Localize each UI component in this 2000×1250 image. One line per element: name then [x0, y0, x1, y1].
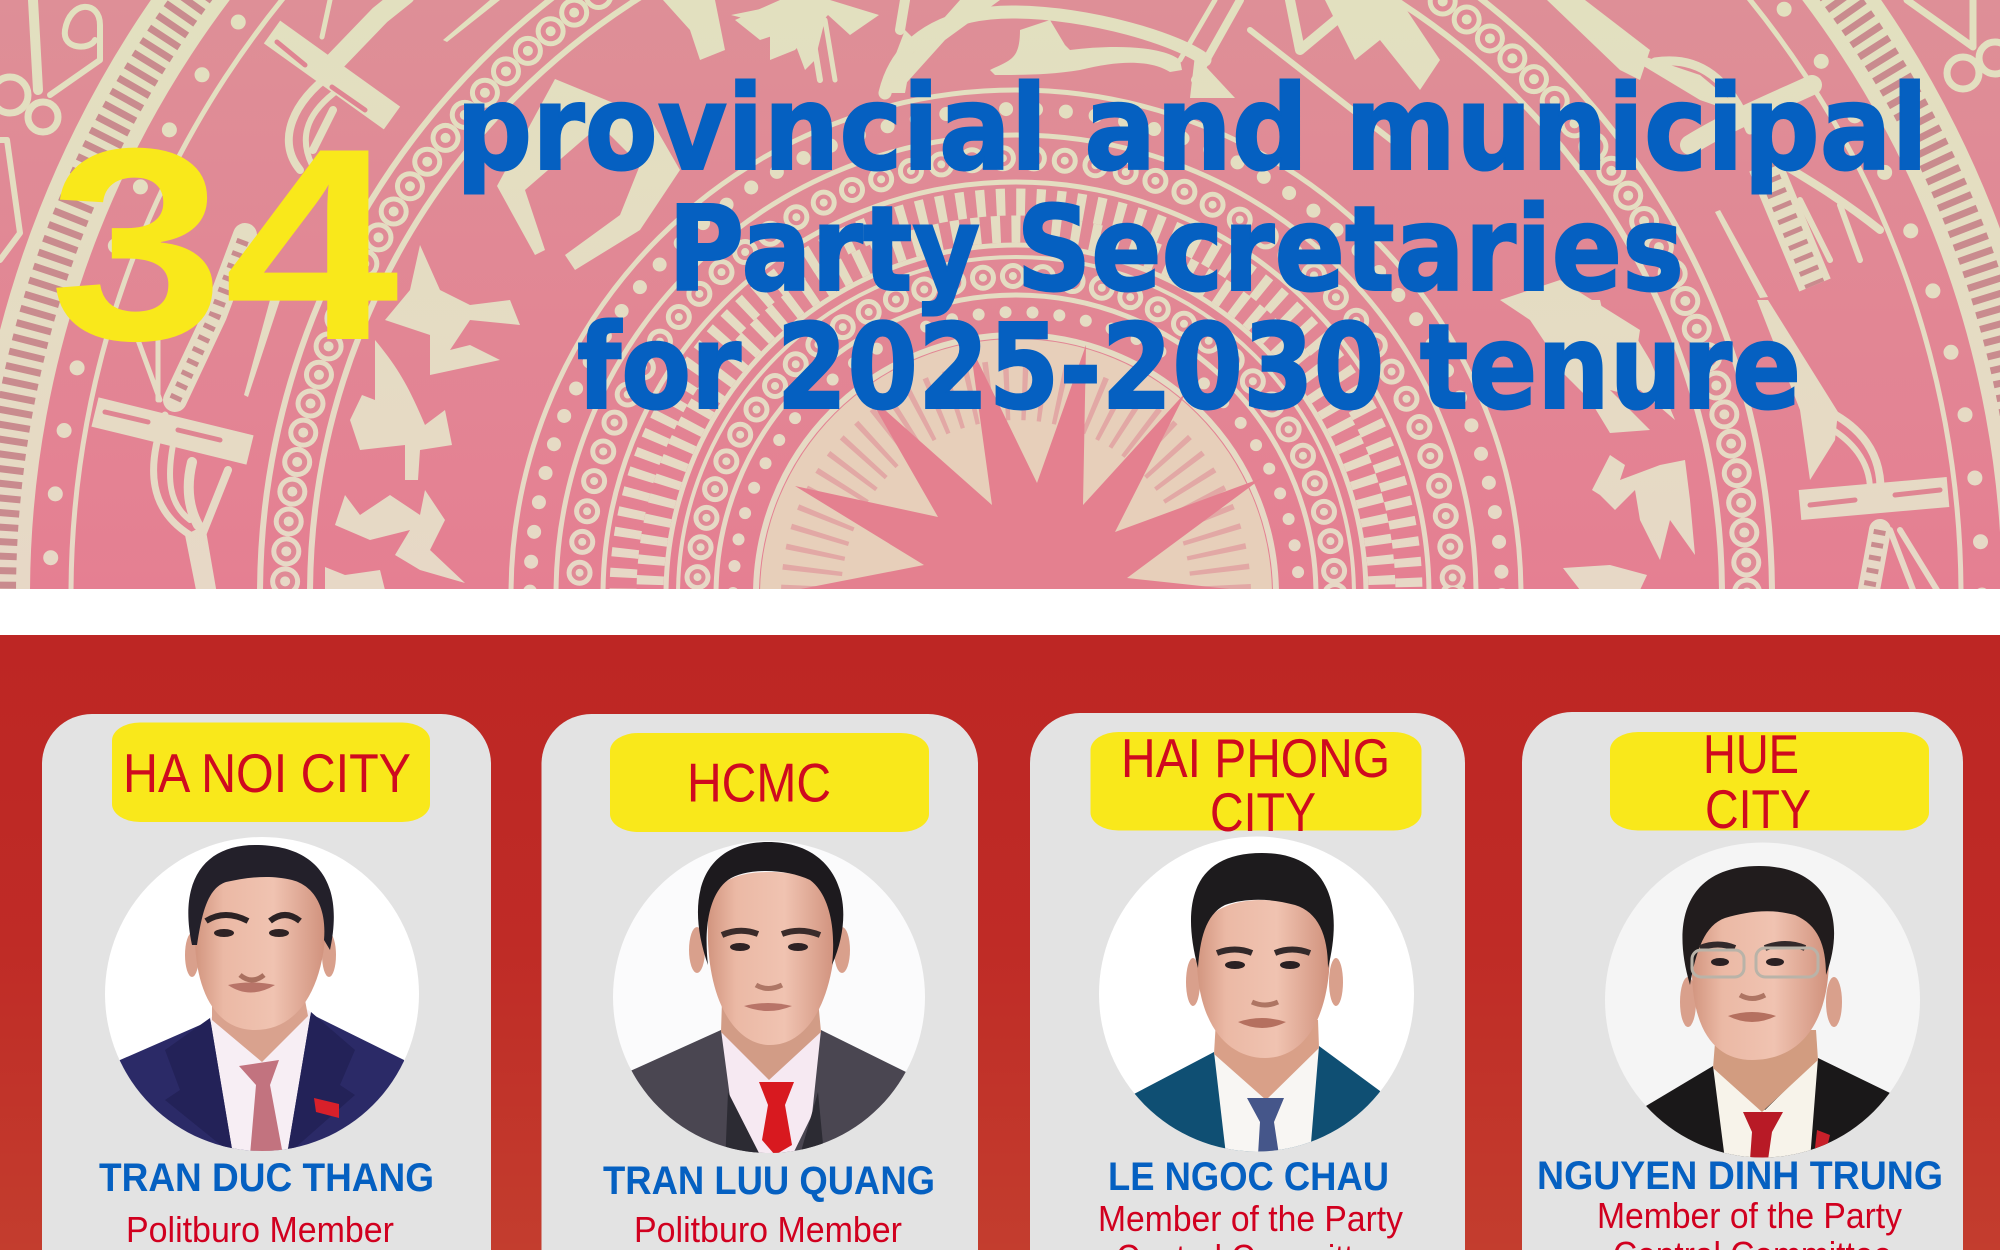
- red panel background: [0, 635, 2000, 1250]
- panel: Hai Phong City card: [1030, 713, 1465, 1250]
- location badge: Ha Noi City: [112, 722, 430, 822]
- panel: Hue City card: [1522, 712, 1963, 1250]
- portrait: Le Ngoc Chau: [1095, 836, 1420, 1165]
- panel: Ha Noi City card: [42, 714, 491, 1250]
- big number 34: 34: [49, 92, 401, 398]
- portrait: Tran Duc Thang: [100, 837, 430, 1165]
- portrait: Tran Luu Quang: [610, 841, 930, 1165]
- location badge: Hai Phong City: [1090, 727, 1422, 843]
- location badge: HCMC: [610, 733, 929, 832]
- figures: outer band birds: [0, 0, 2000, 600]
- location badge: Hue City: CITY: [1705, 778, 1811, 840]
- title: three-line heading: Party Secretaries: [668, 180, 1684, 318]
- location badge: Ha Noi City: HA NOI CITY: [123, 742, 411, 804]
- role: Politburo Member: Politburo Member: [126, 1209, 394, 1250]
- hero banner: bronze drum pattern background: [0, 0, 2000, 589]
- role: Member of the Party Central Committee: Member of the Party: [1098, 1198, 1403, 1239]
- location badge: Hai Phong City: CITY: [1210, 781, 1316, 843]
- location badge: Hue City: [1610, 723, 1929, 840]
- role: Member of the Party Central Committee: Member of the Party: [1597, 1195, 1902, 1236]
- location badge: Hue City: HUE: [1703, 723, 1799, 785]
- name: Tran Luu Quang: TRAN LUU QUANG: [603, 1159, 935, 1203]
- name: Le Ngoc Chau: LE NGOC CHAU: [1108, 1155, 1389, 1199]
- panel: HCMC card: [542, 714, 978, 1250]
- title: three-line heading: for 2025-2030 tenure: [577, 298, 1801, 436]
- role: Politburo Member: Politburo Member: [634, 1209, 902, 1250]
- location badge: HCMC: HCMC: [687, 752, 831, 814]
- title: three-line heading: [456, 59, 1928, 436]
- name: Nguyen Dinh Trung: NGUYEN DINH TRUNG: [1537, 1154, 1943, 1198]
- location badge: Hai Phong City: HAI PHONG: [1121, 727, 1390, 789]
- name: Tran Duc Thang: TRAN DUC THANG: [99, 1156, 434, 1200]
- portrait: Nguyen Dinh Trung: [1605, 842, 1930, 1170]
